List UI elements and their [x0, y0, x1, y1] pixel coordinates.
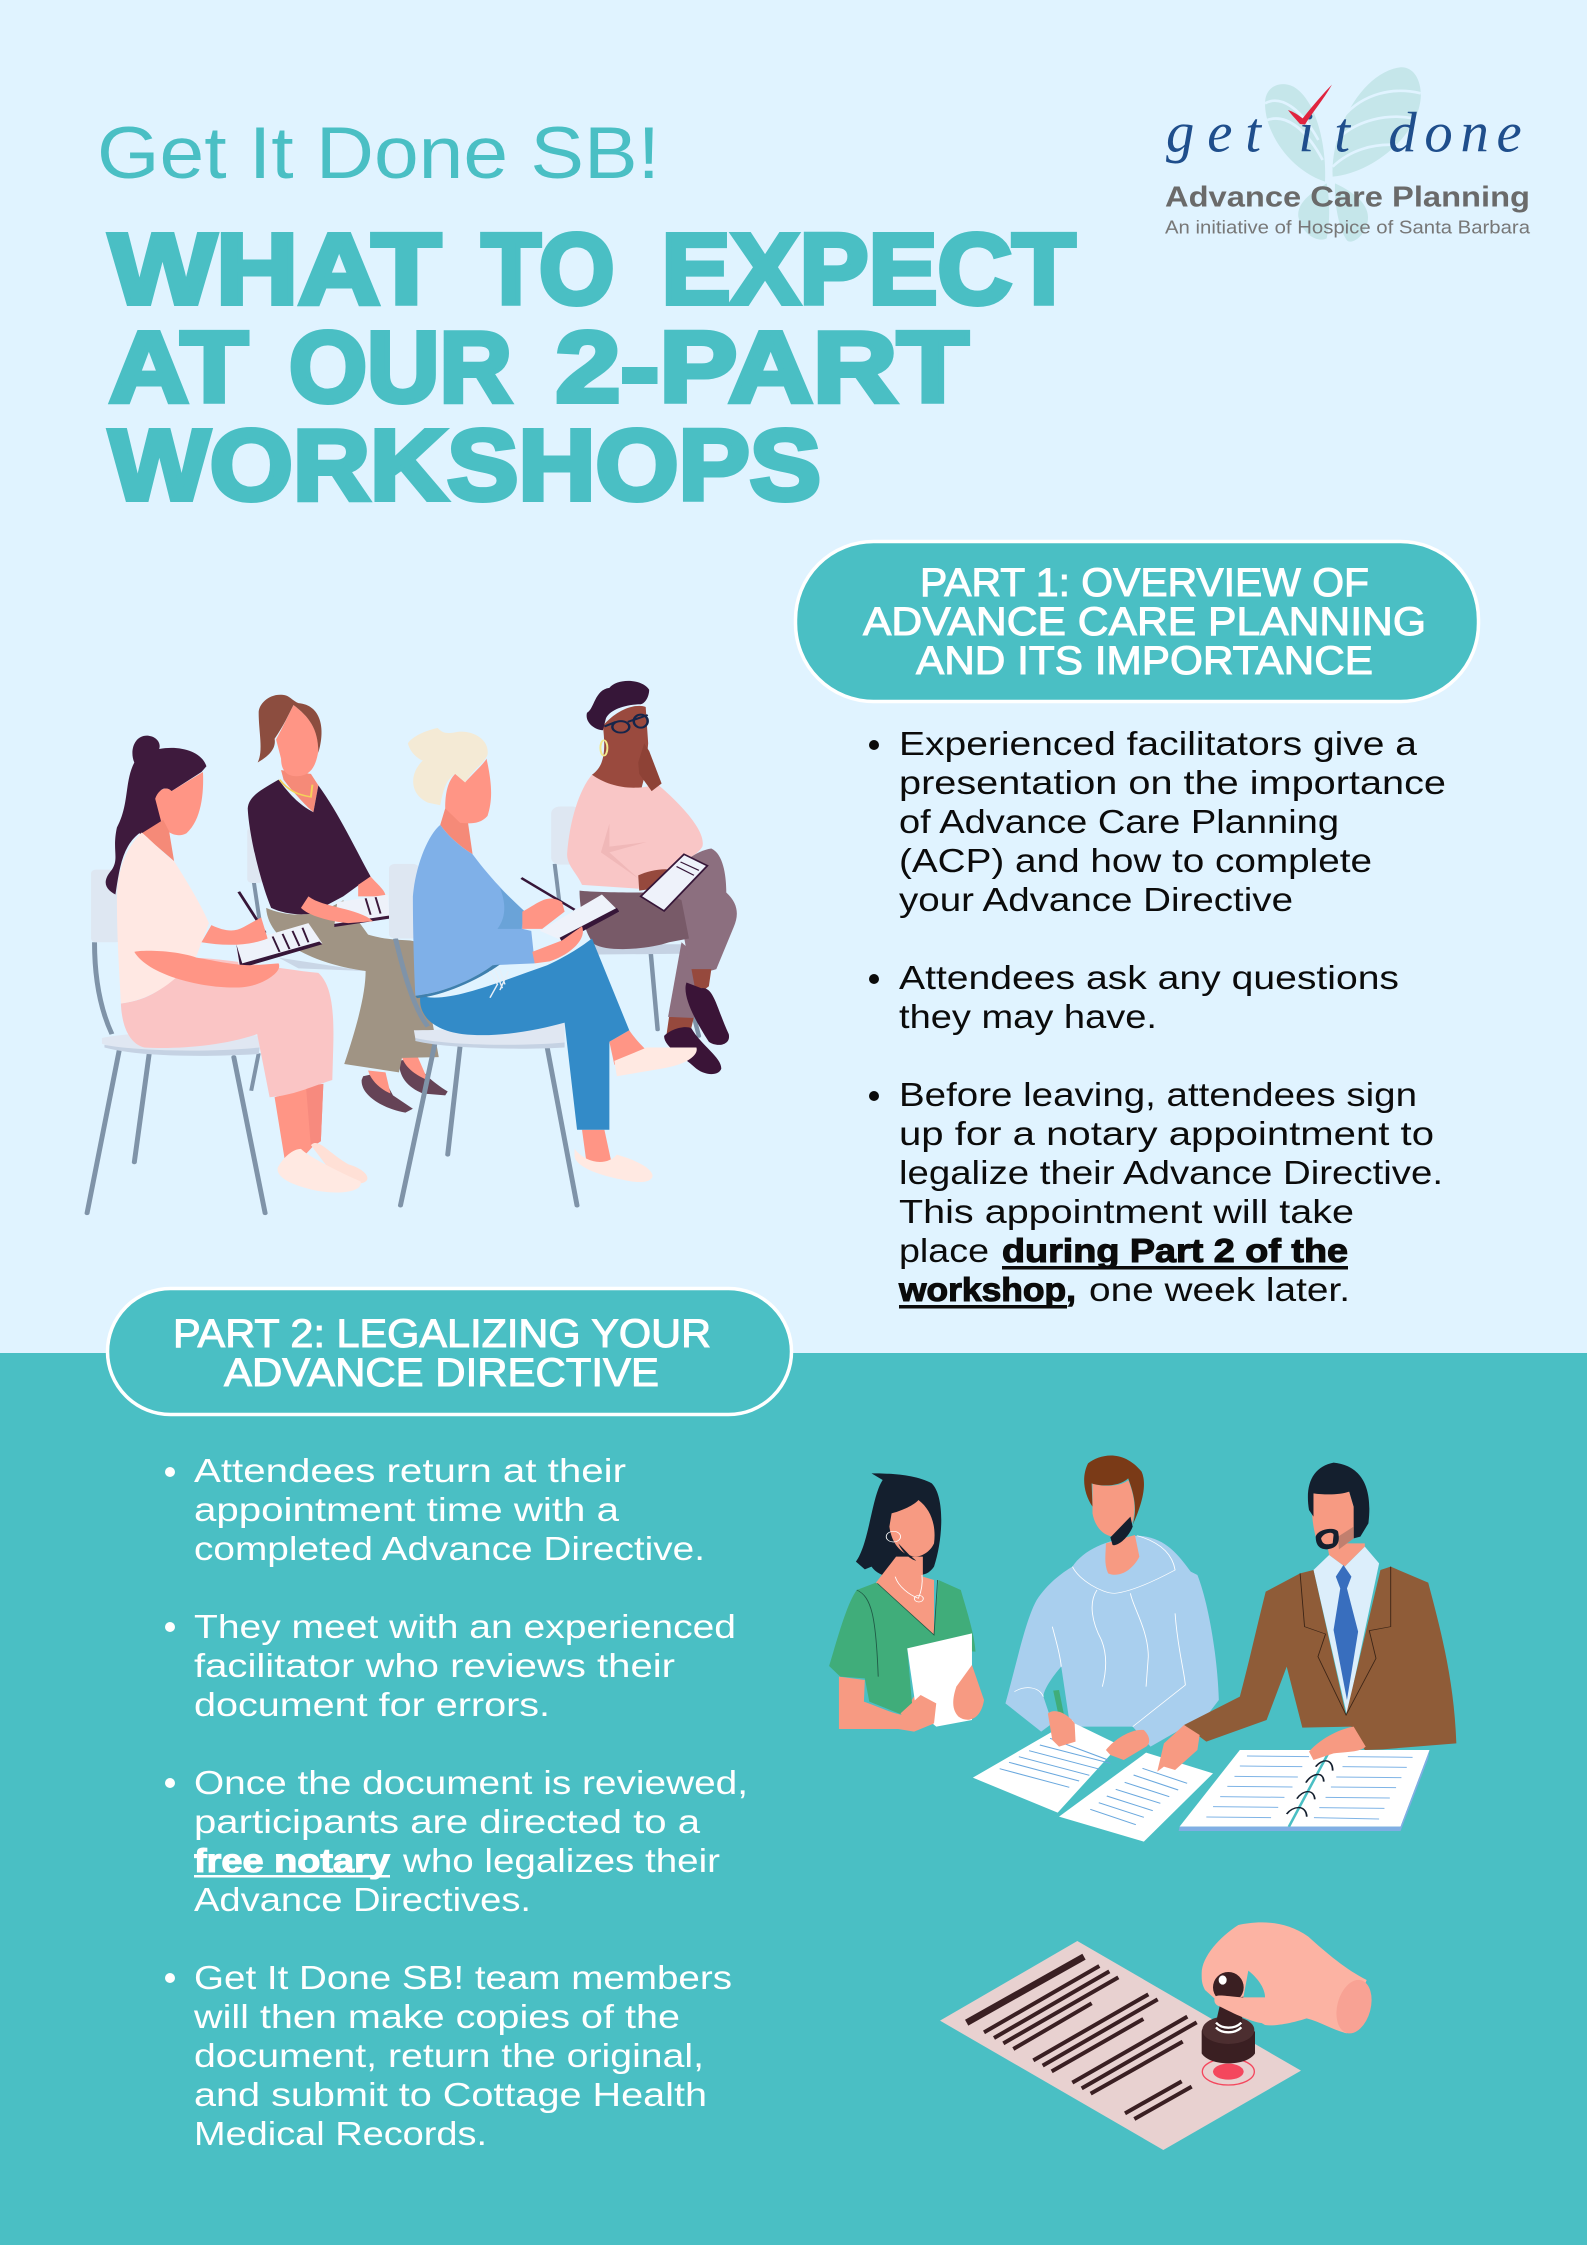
pill: Part 1 heading: PART 1: OVERVIEW OF	[920, 561, 1369, 605]
man in brown suit	[1157, 1463, 1456, 1831]
text block: Part 1 bullets: Attendees ask any questions	[899, 959, 1399, 996]
woman 4 with chair	[551, 681, 737, 1074]
text block: Part 2 bullets	[165, 1452, 748, 2152]
title: 2-PART	[556, 312, 968, 424]
stamp mark	[1202, 2058, 1254, 2085]
logo: get it done Advance Care Planning	[1165, 67, 1531, 242]
title	[109, 214, 1076, 522]
title: WHAT	[109, 214, 441, 326]
kicker: Get It Done SB!: Get It Done SB!	[97, 113, 660, 194]
woman 2 with chair	[247, 695, 448, 1113]
text block: Part 1 bullets: This appointment will take	[899, 1193, 1354, 1230]
text block: Part 2 bullets: They meet with an experienced	[194, 1608, 736, 1645]
script wordmark: get	[1166, 103, 1262, 165]
text block: Part 2 bullets: and submit to Cottage Health	[194, 2076, 707, 2113]
hand with stamp	[1202, 1922, 1377, 2063]
title: EXPECT	[662, 214, 1076, 326]
title: OUR	[289, 312, 512, 424]
text block: Part 1 bullets: workshop,	[898, 1271, 1076, 1308]
pill: Part 1 heading: ADVANCE CARE PLANNING	[863, 600, 1426, 644]
script wordmark: done	[1388, 103, 1522, 165]
text block: Part 1 bullets: up for a notary appointment to	[899, 1115, 1434, 1152]
text block: Part 2 bullets: Advance Directives.	[194, 1881, 531, 1918]
text block: Part 1 bullets: (ACP) and how to complete	[899, 842, 1372, 879]
woman in green with paper	[829, 1473, 984, 1732]
text block: Part 1 bullets: your Advance Directive	[899, 881, 1293, 918]
text block: Part 2 bullets: Get It Done SB! team members	[194, 1959, 732, 1996]
text block: Part 1 bullets: legalize their Advance Directive.	[899, 1154, 1443, 1191]
illustration: three people reviewing documents at a table	[829, 1456, 1456, 1842]
text block: Part 1 bullets	[869, 725, 1446, 1308]
icon: red check mark	[1288, 85, 1332, 125]
pill: Part 1 heading: AND ITS IMPORTANCE	[916, 639, 1373, 683]
text block: Part 2 bullets: Medical Records.	[194, 2115, 487, 2152]
title: AT	[109, 312, 248, 424]
pill: Part 2 heading: ADVANCE DIRECTIVE	[224, 1351, 659, 1395]
woman 3 with chair	[389, 728, 697, 1206]
logo tagline: An initiative of Hospice of Santa Barbara	[1165, 217, 1531, 237]
text block: Part 2 bullets: completed Advance Directive.	[194, 1530, 705, 1567]
pill: Part 2 heading	[108, 1288, 792, 1414]
text block: Part 1 bullets: they may have.	[899, 998, 1157, 1035]
title: TO	[482, 214, 614, 326]
script wordmark	[1166, 103, 1522, 165]
text block: Part 2 bullets: Once the document is reviewed,	[194, 1764, 748, 1801]
text block: Part 2 bullets: participants are directed to a	[194, 1803, 701, 1840]
text block: Part 2 bullets: who legalizes their	[402, 1842, 720, 1879]
text block: Part 2 bullets: appointment time with a	[194, 1491, 620, 1528]
text block: Part 1 bullets: one week later.	[1089, 1271, 1350, 1308]
script wordmark: it	[1298, 103, 1351, 165]
text block: Part 2 bullets: facilitator who reviews their	[194, 1647, 675, 1684]
text block: Part 1 bullets: place	[899, 1232, 989, 1269]
text block: Part 1 bullets: Before leaving, attendees sign	[899, 1076, 1417, 1113]
text block: Part 2 bullets: document, return the original,	[194, 2037, 704, 2074]
text block: Part 1 bullets: of Advance Care Planning	[899, 803, 1339, 840]
text block: Part 2 bullets: document for errors.	[194, 1686, 550, 1723]
text block: Part 1 bullets: presentation on the importance	[899, 764, 1446, 801]
document	[940, 1941, 1301, 2150]
man in light blue hoodie	[973, 1456, 1219, 1842]
icon: butterfly wings	[1265, 67, 1421, 242]
pill: Part 1 heading	[796, 542, 1478, 702]
illustration: four women seated with clipboards	[84, 680, 737, 1216]
text block: Part 2 bullets: free notary	[194, 1842, 391, 1879]
woman 1 with chair	[87, 736, 367, 1213]
logo subtitle: Advance Care Planning	[1165, 182, 1530, 214]
pill: Part 2 heading: PART 2: LEGALIZING YOUR	[173, 1312, 711, 1356]
text block: Part 1 bullets: during Part 2 of the	[1002, 1232, 1348, 1269]
text block: Part 2 bullets: will then make copies of the	[193, 1998, 680, 2035]
text block: Part 1 bullets: Experienced facilitators give a	[899, 725, 1418, 762]
illustration: hand stamping a document	[940, 1922, 1372, 2150]
text block: Part 2 bullets: Attendees return at their	[194, 1452, 626, 1489]
title: WORKSHOPS	[109, 410, 821, 522]
